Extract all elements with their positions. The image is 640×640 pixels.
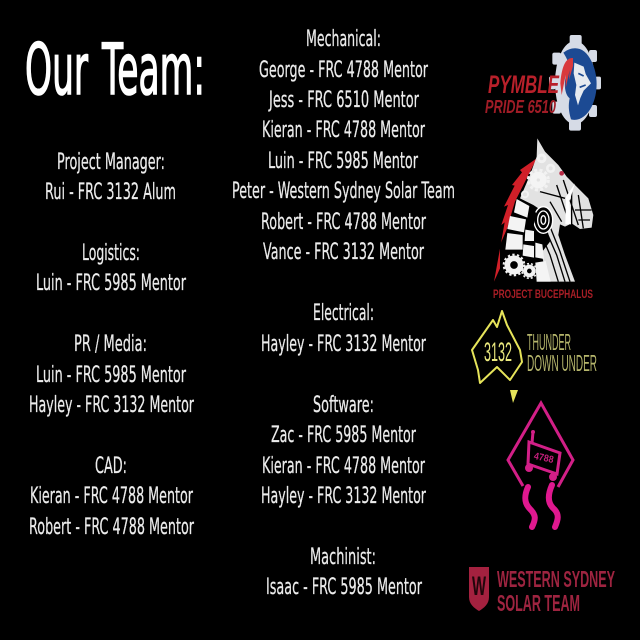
role: software: Kieran - FRC 4788 Mentor bbox=[262, 454, 426, 479]
role: CAD bbox=[29, 454, 195, 540]
red mane bbox=[494, 158, 537, 282]
role: mechanical: Luin - FRC 5985 Mentor bbox=[268, 149, 419, 174]
gear and lion emblem bbox=[549, 35, 601, 131]
spike and head top bbox=[520, 138, 593, 282]
role: project manager bbox=[45, 150, 176, 205]
role: mechanical: Kieran - FRC 4788 Mentor bbox=[262, 118, 426, 143]
Tasmania bbox=[510, 390, 518, 403]
role: mechanical: Jess - FRC 6510 Mentor bbox=[268, 88, 420, 113]
role: CAD: Robert - FRC 4788 Mentor bbox=[29, 515, 195, 540]
team name: PROJECT BUCEPHALUS bbox=[493, 289, 593, 301]
role: CAD: Kieran - FRC 4788 Mentor bbox=[30, 484, 194, 509]
role: logistics: Luin - FRC 5985 Mentor bbox=[36, 271, 187, 296]
shield bbox=[469, 567, 489, 611]
role: electrical: Electrical: bbox=[313, 301, 374, 326]
role: machinist bbox=[266, 545, 423, 600]
infographic canvas: Team: bbox=[102, 29, 205, 111]
role: PR and media: Hayley - FRC 3132 Mentor bbox=[29, 393, 195, 418]
wheel tracks bbox=[525, 485, 558, 527]
role: mechanical: Vance - FRC 3132 Mentor bbox=[263, 240, 425, 265]
role: software: Hayley - FRC 3132 Mentor bbox=[261, 484, 427, 509]
role: electrical bbox=[261, 301, 427, 357]
left column: team roles bbox=[29, 150, 195, 540]
role: project manager: Rui - FRC 3132 Alum bbox=[45, 180, 176, 205]
role: software: Zac - FRC 5985 Mentor bbox=[271, 423, 417, 448]
team name bbox=[497, 566, 615, 616]
robot: 4788 bbox=[533, 451, 555, 466]
logo: Thunder Down Under 3132 bbox=[472, 311, 597, 403]
team name bbox=[485, 71, 560, 117]
team name: PYMBLE bbox=[488, 71, 560, 99]
Australia outline bbox=[472, 311, 522, 383]
role: software bbox=[261, 393, 427, 509]
role: mechanical: Mechanical: bbox=[306, 27, 381, 52]
role: mechanical: Robert - FRC 4788 Mentor bbox=[261, 210, 427, 235]
mosaic tiles bbox=[500, 198, 543, 282]
red dot bbox=[559, 171, 564, 176]
shield letter: W bbox=[472, 571, 486, 601]
role: mechanical: Peter - Western Sydney Solar Team bbox=[232, 179, 455, 204]
logo: Western Sydney Solar Team bbox=[469, 566, 615, 616]
role: PR and media: Luin - FRC 5985 Mentor bbox=[36, 363, 187, 388]
white blaze bbox=[565, 183, 575, 224]
role: electrical: Hayley - FRC 3132 Mentor bbox=[261, 332, 427, 357]
team name bbox=[527, 329, 597, 376]
spiral bbox=[534, 207, 553, 233]
diamond outline bbox=[508, 403, 573, 487]
role: mechanical: George - FRC 4788 Mentor bbox=[259, 58, 429, 83]
centre column: team roles bbox=[232, 27, 455, 600]
lion face details bbox=[578, 73, 586, 87]
role: project manager: Project Manager: bbox=[57, 150, 165, 175]
horse bbox=[494, 138, 593, 282]
role: machinist: Machinist: bbox=[310, 545, 376, 570]
red mane bbox=[560, 58, 573, 95]
lion face bbox=[574, 63, 591, 105]
role: PR and media: PR / Media: bbox=[74, 332, 147, 357]
logo: Project Bucephalus bbox=[493, 138, 593, 301]
role: CAD: CAD: bbox=[95, 454, 127, 479]
head details bbox=[540, 180, 592, 282]
logo: Thunder Down Under 3132: 3132 bbox=[484, 337, 512, 367]
blue crescent bbox=[563, 48, 597, 120]
title: Our bbox=[25, 29, 88, 111]
gears bbox=[504, 155, 554, 278]
gear bbox=[549, 35, 601, 131]
team name: THUNDER bbox=[527, 329, 571, 355]
role: mechanical bbox=[232, 27, 455, 265]
role: machinist: Isaac - FRC 5985 Mentor bbox=[266, 575, 423, 600]
role: logistics bbox=[36, 241, 187, 296]
logo: team 4788 bbox=[508, 403, 573, 527]
role: software: Software: bbox=[313, 393, 374, 418]
role: PR and media bbox=[29, 332, 195, 418]
role: logistics: Logistics: bbox=[82, 241, 140, 266]
team name: PRIDE 6510 bbox=[485, 97, 556, 117]
logo: Pymble Pride 6510 bbox=[485, 35, 601, 131]
